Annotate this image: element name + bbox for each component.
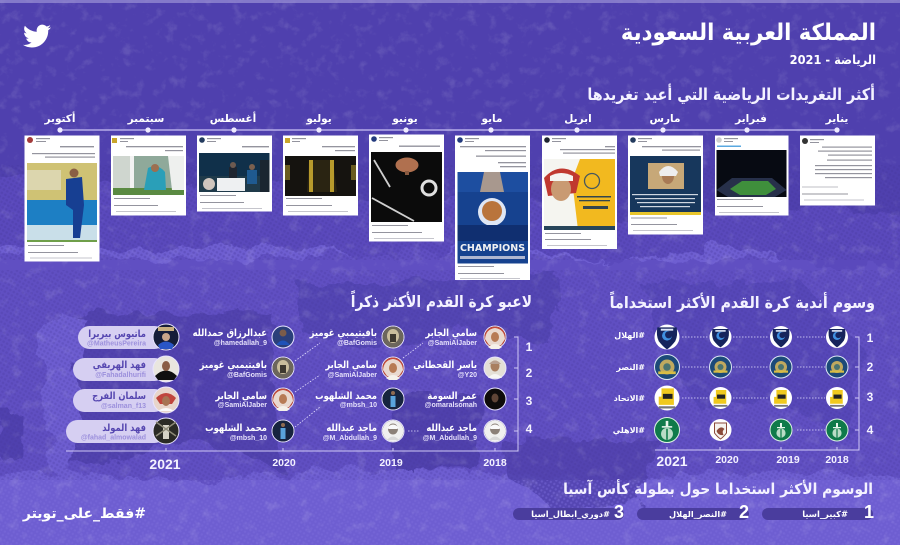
rank numbers: 1	[526, 340, 533, 354]
heading: asian cup hashtags: الوسوم الأكثر استخداما حول بطولة كأس آسيا	[563, 479, 873, 498]
column 2018	[413, 326, 506, 442]
column 2020	[193, 326, 294, 442]
column 2018: @SamiAlJaber	[428, 340, 477, 347]
rank numbers	[526, 340, 533, 436]
hashtag labels: #النصر	[615, 363, 645, 372]
column 2020: @hamedallah_9	[214, 340, 267, 347]
column 2019: بافيتيمبي غوميز	[309, 327, 377, 339]
column 2021 highlighted: ماتيوس بيريرا	[88, 328, 146, 340]
rank numbers: 1	[867, 331, 874, 345]
tweet card: July	[283, 136, 358, 216]
title: المملكة العربية السعودية	[621, 19, 876, 46]
heading: most mentioned footballers: لاعبو كرة القدم الأكثر ذكراً	[351, 290, 532, 311]
column 2021 highlighted: @Fahadalhurifi	[95, 372, 146, 379]
column 2019: @M_Abdullah_9	[323, 435, 377, 442]
year labels: 2021	[149, 456, 181, 472]
year labels: 2021	[656, 453, 688, 469]
year labels: 2019	[776, 454, 800, 466]
column 2019	[309, 326, 404, 442]
club logos 2021	[654, 324, 680, 442]
column 2019: @SamiAlJaber	[328, 372, 377, 379]
timeline: months: أكتوبر	[43, 111, 76, 125]
timeline: months	[43, 111, 848, 133]
subtitle: الرياضة - 2021	[790, 53, 876, 67]
chart axes	[655, 337, 859, 450]
rank numbers	[867, 331, 874, 437]
tweet card: March	[628, 136, 703, 234]
column 2019: @mbsh_10	[340, 402, 377, 409]
tweet card: September	[111, 136, 186, 216]
column 2020: @SamiAlJaber	[218, 402, 267, 409]
column 2018: @omaralsomah	[425, 402, 477, 409]
column 2019: محمد الشلهوب	[315, 390, 377, 402]
year labels	[149, 456, 507, 472]
timeline: months: مارس	[650, 113, 680, 125]
timeline: months: يوليو	[305, 113, 332, 125]
year labels: 2018	[825, 454, 849, 466]
hashtag labels: #الاهلي	[613, 426, 645, 435]
column 2019: @BafGomis	[337, 340, 377, 347]
heading: most used football club hashtags: وسوم أندية كرة القدم الأكثر استخداماً	[609, 291, 875, 312]
hashtag labels: #الاتحاد	[614, 394, 645, 403]
tweet card: June	[369, 134, 444, 242]
club logos 2019	[770, 326, 792, 441]
ranked hashtags: 1	[864, 502, 874, 522]
rank numbers: 2	[867, 360, 874, 374]
heading: most retweeted sports tweets: أكثر التغريدات الرياضية التي أعيد تغريدها	[587, 84, 875, 105]
tweet card: August	[197, 136, 272, 212]
ranked hashtags: #كبير_اسيا	[802, 509, 848, 520]
ranked hashtags: #النصر_الهلال	[669, 509, 727, 520]
column 2020: بافيتيمبي غوميز	[199, 359, 267, 371]
year labels: 2018	[483, 457, 507, 469]
column 2018: ياسر القحطاني	[413, 359, 477, 371]
tweet card: January	[800, 136, 875, 206]
year labels: 2020	[715, 454, 739, 466]
ranked hashtags: #دوري_ابطال_اسيا	[531, 509, 610, 520]
ranked hashtags: 3	[614, 502, 624, 522]
rank numbers: 2	[526, 366, 533, 380]
column 2020: عبدالرزاق حمدالله	[193, 327, 267, 339]
timeline: months: مايو	[481, 113, 502, 125]
ranked hashtags: 2	[739, 502, 749, 522]
club logos 2020	[710, 326, 732, 441]
column 2021 highlighted: سلمان الفرج	[92, 390, 146, 402]
column 2021 highlighted: @salman_f13	[101, 403, 146, 410]
timeline: months: ابريل	[564, 113, 592, 125]
column 2020: سامي الجابر	[215, 390, 267, 402]
column 2018: ماجد عبدالله	[426, 422, 477, 434]
footer hashtag: #فقط_على_تويتر	[22, 506, 146, 522]
column 2018: عمر السومة	[427, 390, 477, 402]
column 2021 highlighted: فهد المولد	[102, 422, 146, 434]
column 2020: محمد الشلهوب	[205, 422, 267, 434]
timeline: months: أغسطس	[210, 111, 256, 125]
hashtag labels: #الهلال	[614, 331, 645, 340]
year labels: 2020	[272, 457, 296, 469]
icon: twitter bird	[23, 25, 51, 47]
column 2020: @BafGomis	[227, 372, 267, 379]
timeline: months: فبراير	[734, 113, 767, 125]
chart axes	[66, 337, 518, 451]
year labels: 2019	[379, 457, 403, 469]
column 2021 highlighted: @MatheusPereira	[87, 340, 146, 348]
year labels	[656, 453, 849, 469]
ranked hashtags	[513, 502, 874, 522]
column 2019: سامي الجابر	[325, 359, 377, 371]
column 2019: ماجد عبدالله	[326, 422, 377, 434]
hashtag labels	[613, 331, 645, 435]
tweet card: October	[24, 136, 100, 262]
column 2021 highlighted: @fahad_almowalad	[81, 434, 146, 442]
tweet card: April	[542, 136, 617, 249]
timeline: months: يناير	[825, 113, 848, 125]
column 2021 highlighted: فهد الهريفي	[93, 359, 146, 371]
rank numbers: 3	[867, 390, 874, 404]
club logos 2018	[826, 326, 848, 441]
timeline: months: سبتمبر	[127, 113, 164, 125]
column 2020: @mbsh_10	[230, 435, 267, 442]
rank numbers: 4	[526, 422, 533, 436]
timeline: months: يونيو	[391, 113, 418, 125]
rank numbers: 4	[867, 423, 874, 437]
rank numbers: 3	[526, 394, 533, 408]
tweet card: February	[715, 136, 788, 216]
connectors	[295, 343, 423, 431]
chart: most mentioned footballers	[66, 324, 533, 472]
connectors	[682, 337, 825, 430]
column 2018: سامي الجابر	[425, 327, 477, 339]
column 2021 highlighted	[66, 324, 179, 444]
column 2018: @M_Abdullah_9	[423, 435, 477, 442]
column 2018: @Y20	[458, 372, 477, 379]
chart: most used club hashtags	[613, 324, 874, 469]
tweet card: May: CHAMPIONS	[460, 243, 525, 254]
tweet card: May	[455, 136, 530, 280]
